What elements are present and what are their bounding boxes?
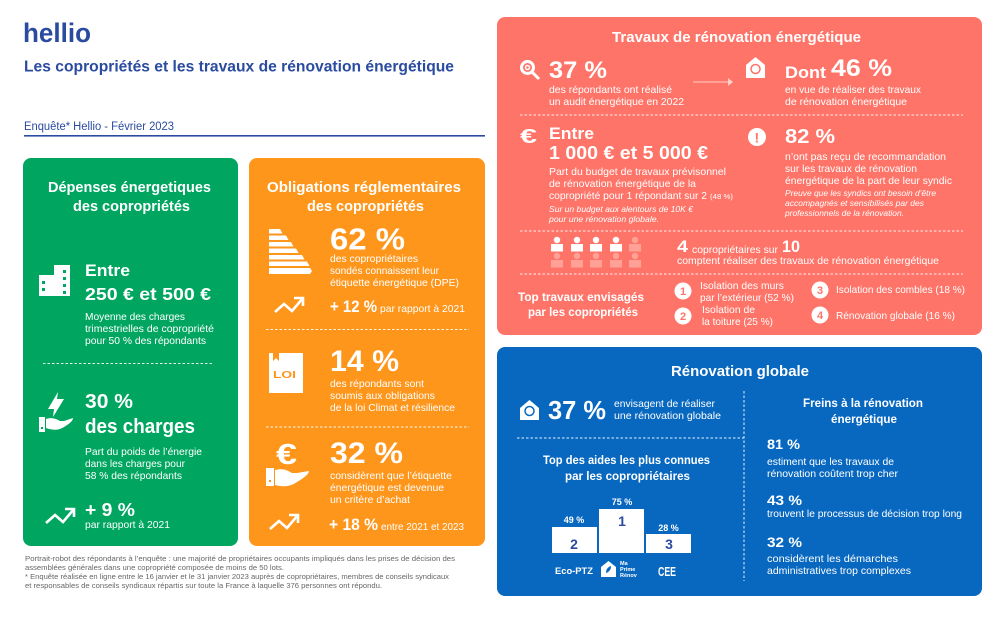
list: top travaux: Isolation des combles (18 %) bbox=[836, 284, 965, 296]
icon: euro in hand: € bbox=[276, 439, 297, 471]
stat: plus 18 %: + 18 % bbox=[329, 515, 378, 534]
stat: 30 % des charges bbox=[85, 391, 202, 482]
stat: 30 % des charges: 58 % des répondants bbox=[85, 470, 182, 482]
stat: entre 250 et 500 euros: Entre bbox=[85, 261, 130, 280]
stat: 81 %: rénovation coûtent trop cher bbox=[767, 468, 899, 480]
stat: 82 %: énergétique de la part de leur syndic bbox=[785, 175, 952, 187]
stat: 82 %: 82 % bbox=[785, 126, 835, 148]
stat: 43 %: trouvent le processus de décision trop long bbox=[767, 508, 962, 520]
stat: 62 %: sondés connaissent leur bbox=[330, 265, 439, 277]
list: top travaux: Isolation des murs bbox=[700, 280, 784, 292]
stat: 37 % audit: un audit énergétique en 2022 bbox=[549, 96, 684, 108]
stat: 4 copropriétaires sur 10: 10 bbox=[782, 237, 800, 256]
stat: entre 250 et 500 euros: Moyenne des charges bbox=[85, 311, 185, 323]
list: top travaux: Isolation de bbox=[702, 304, 755, 316]
stat: 82 %: sur les travaux de rénovation bbox=[785, 163, 917, 175]
logo: MaPrimeRénov bbox=[601, 561, 638, 579]
panel: dépenses énergétiques bbox=[23, 158, 238, 546]
stat: 4 copropriétaires sur 10: comptent réaliser des travaux de rénovation énergétique bbox=[677, 255, 939, 267]
chart: podium: 2 bbox=[570, 536, 578, 552]
stat: 37 % audit bbox=[549, 57, 684, 108]
stat: 4 copropriétaires sur 10: 4 bbox=[677, 237, 689, 256]
stat: 37 % audit: des répondants ont réalisé bbox=[549, 84, 672, 96]
footnotes: Portrait-robot des répondants à l’enquête : une majorité de propriétaires occupants impliqués dans les prises de décision des bbox=[25, 554, 455, 563]
icon: energy label bars bbox=[269, 229, 312, 274]
heading: freins: Freins à la rénovation bbox=[803, 398, 923, 410]
list: top travaux: la toiture (25 %) bbox=[702, 316, 773, 328]
stat: entre 1000 et 5000 euros: copropriété pour 1 répondant sur 2 bbox=[549, 190, 707, 202]
stat: 62 % bbox=[330, 222, 459, 289]
stat: 43 % bbox=[767, 492, 962, 520]
stat: 82 %: accompagnés et sensibilisés par des bbox=[785, 199, 924, 208]
label: Eco-PTZ: Eco-PTZ bbox=[555, 566, 594, 576]
stat: 82 %: n’ont pas reçu de recommandation bbox=[785, 151, 946, 163]
chart: podium: 75 % bbox=[612, 497, 632, 507]
stat: 62 %: des copropriétaires bbox=[330, 253, 418, 265]
panel: obligations réglementaires bbox=[249, 158, 485, 546]
stat: 32 %: 32 % bbox=[330, 437, 403, 470]
stat: entre 250 et 500 euros: trimestrielles de copropriété bbox=[85, 323, 214, 335]
stat: 32 %: énergétique est devenue bbox=[330, 482, 444, 494]
stat: entre 1000 et 5000 euros: de rénovation énergétique de la bbox=[549, 178, 696, 190]
chart: podium bbox=[552, 497, 691, 553]
list: top travaux: 1 bbox=[680, 286, 686, 298]
heading: top travaux: Top travaux envisagés bbox=[518, 290, 644, 304]
stat: entre 250 et 500 euros: pour 50 % des répondants bbox=[85, 335, 206, 347]
stat: 43 %: 43 % bbox=[767, 492, 803, 508]
stat: 30 % des charges: dans les charges pour bbox=[85, 458, 185, 470]
stat: 37 % rénovation globale: une rénovation globale bbox=[614, 410, 721, 422]
stat: plus 9 %: par rapport à 2021 bbox=[85, 519, 170, 531]
survey subtitle: Enquête* Hellio - Février 2023 bbox=[24, 121, 174, 133]
stat: 37 % rénovation globale: 37 % bbox=[548, 395, 606, 425]
icon: people pictogram, 4 of 10 bbox=[551, 237, 641, 268]
chart: podium: 3 bbox=[665, 536, 673, 552]
panel: rénovation globale bbox=[497, 347, 982, 596]
logo: MaPrimeRénov: Rénov bbox=[620, 573, 638, 579]
heading: freins: énergétique bbox=[831, 414, 897, 426]
stat: 32 %: un critère d’achat bbox=[330, 494, 410, 506]
icon: law book bbox=[269, 353, 303, 393]
stat: dont 46 %: Dont bbox=[785, 63, 826, 82]
stat: plus 12 %: + 12 % bbox=[330, 297, 377, 316]
icon: exclamation bbox=[748, 128, 766, 146]
heading: obligations bbox=[267, 180, 461, 215]
label: CEE: CEE bbox=[658, 564, 676, 579]
footnotes: * Enquête réalisée en ligne entre le 16 janvier et le 31 janvier 2023 auprès de copropriétaires, membres de conseils syndicaux bbox=[25, 572, 449, 581]
stat: entre 1000 et 5000 euros: Part du budget de travaux prévisonnel bbox=[549, 166, 726, 178]
stat: 37 % rénovation globale: envisagent de réaliser bbox=[614, 398, 715, 410]
stat: 82 % bbox=[784, 126, 952, 218]
stat: 30 % des charges: Part du poids de l’énergie bbox=[85, 446, 202, 458]
heading: top travaux: par les copropriétés bbox=[528, 305, 638, 319]
heading: travaux: Travaux de rénovation énergétique bbox=[612, 30, 861, 46]
stat: 37 % audit: 37 % bbox=[549, 57, 607, 84]
icon: house renovation bbox=[746, 57, 765, 78]
icon: euro in hand bbox=[266, 439, 309, 486]
stat: dont 46 %: de rénovation énergétique bbox=[785, 96, 907, 108]
heading: top des aides bbox=[543, 455, 710, 483]
stat: plus 18 % bbox=[329, 515, 464, 534]
stat: 30 % des charges: des charges bbox=[85, 416, 195, 438]
stat: 32 %: considèrent les démarches bbox=[767, 553, 898, 565]
stat: 32 %: considèrent que l’étiquette bbox=[330, 470, 452, 482]
stat: 32 %: administratives trop complexes bbox=[767, 565, 911, 577]
heading: obligations: Obligations réglementaires bbox=[267, 180, 461, 196]
list: top travaux: 2 bbox=[680, 311, 686, 323]
heading: dépenses: des copropriétés bbox=[73, 199, 190, 215]
stat: plus 12 % bbox=[330, 297, 465, 316]
stat: plus 12 %: par rapport à 2021 bbox=[380, 303, 465, 315]
stat: 81 % bbox=[767, 436, 899, 480]
stat: 62 %: 62 % bbox=[330, 222, 405, 256]
heading: dépenses: Dépenses énergetiques bbox=[48, 180, 211, 196]
stat: 14 %: de la loi Climat et résilience bbox=[330, 402, 455, 414]
stat: 81 %: 81 % bbox=[767, 436, 801, 452]
icon: law book: LOI bbox=[273, 369, 296, 381]
stat: 82 %: Preuve que les syndics ont besoin d’être bbox=[785, 189, 937, 198]
stat: 14 %: des répondants sont bbox=[330, 378, 424, 390]
icon: magnifier bbox=[522, 62, 539, 79]
heading: freins bbox=[803, 398, 923, 426]
stat: plus 18 %: entre 2021 et 2023 bbox=[381, 521, 464, 533]
list: top travaux: 4 bbox=[817, 310, 824, 322]
stat: dont 46 % bbox=[785, 55, 922, 108]
heading: top des aides: Top des aides les plus connues bbox=[543, 455, 710, 467]
stat: 82 %: professionnels de la rénovation. bbox=[784, 209, 904, 218]
chart: podium: 28 % bbox=[658, 523, 679, 533]
logo: MaPrimeRénov: Ma bbox=[620, 561, 629, 567]
icon: energy in hand bbox=[39, 392, 73, 432]
list: top travaux bbox=[674, 280, 965, 328]
stat: 4 copropriétaires sur 10 bbox=[677, 237, 939, 267]
stat: plus 9 %: + 9 % bbox=[85, 500, 135, 520]
logo: hellio: hellio bbox=[23, 18, 91, 48]
logo: MaPrimeRénov: Prime bbox=[620, 567, 635, 573]
stat: 14 %: soumis aux obligations bbox=[330, 390, 435, 402]
icon: house renovation bbox=[520, 400, 539, 420]
stat: 81 %: estiment que les travaux de bbox=[767, 456, 894, 468]
stat: entre 250 et 500 euros: 250 € et 500 € bbox=[85, 284, 211, 304]
heading: top travaux bbox=[518, 290, 644, 319]
icon: trend arrow bbox=[46, 509, 74, 523]
stat: entre 1000 et 5000 euros: Sur un budget aux alentours de 10K € bbox=[549, 205, 694, 214]
heading: top des aides: par les copropriétaires bbox=[565, 471, 690, 483]
stat: 14 %: 14 % bbox=[330, 345, 399, 378]
stat: entre 1000 et 5000 euros: 1 000 € et 5 000 € bbox=[549, 143, 708, 163]
stat: 32 % bbox=[767, 534, 911, 577]
stat: 30 % des charges: 30 % bbox=[85, 391, 133, 413]
stat: dont 46 %: en vue de réaliser des travaux bbox=[785, 84, 922, 96]
stat: entre 250 et 500 euros bbox=[85, 261, 214, 347]
title: Les copropriétés et les travaux de rénovation énergétique bbox=[24, 58, 454, 76]
arrow bbox=[693, 78, 733, 86]
stat: dont 46 %: 46 % bbox=[831, 55, 892, 82]
stat: 4 copropriétaires sur 10: copropriétaires sur bbox=[692, 244, 778, 256]
stat: 32 % bbox=[330, 437, 452, 506]
heading: dépenses bbox=[48, 180, 211, 215]
panel: travaux de rénovation énergétique bbox=[497, 17, 982, 335]
chart: podium: 49 % bbox=[564, 515, 584, 525]
stat: 14 % bbox=[330, 345, 455, 414]
footnotes: assemblées générales dans une copropriété composée de moins de 50 lots. bbox=[25, 563, 284, 572]
icon: exclamation: ! bbox=[754, 130, 759, 146]
footnotes bbox=[25, 554, 455, 590]
stat: 62 %: étiquette énergétique (DPE) bbox=[330, 277, 459, 289]
heading: rénovation globale: Rénovation globale bbox=[671, 364, 809, 380]
icon: euro: € bbox=[520, 126, 537, 148]
heading: obligations: des copropriétés bbox=[307, 199, 424, 215]
stat: plus 9 % bbox=[85, 500, 170, 531]
list: top travaux: par l’extérieur (52 %) bbox=[700, 292, 794, 304]
footnotes: et responsables de conseils syndicaux répartis sur toute la France à laquelle 376 personnes ont répondu. bbox=[25, 581, 382, 590]
icon: trend arrow bbox=[275, 298, 303, 312]
icon: trend arrow bbox=[270, 515, 298, 529]
icon: building bbox=[39, 265, 70, 296]
stat: 32 %: 32 % bbox=[767, 534, 803, 550]
list: top travaux: Rénovation globale (16 %) bbox=[836, 310, 955, 322]
list: top travaux: 3 bbox=[817, 285, 823, 297]
stat: 37 % rénovation globale bbox=[548, 395, 721, 425]
stat: entre 1000 et 5000 euros: pour une rénovation globale. bbox=[548, 215, 659, 224]
stat: entre 1000 et 5000 euros: (48 %) bbox=[710, 192, 734, 201]
stat: entre 1000 et 5000 euros: Entre bbox=[549, 124, 594, 143]
stat: entre 1000 et 5000 euros bbox=[548, 124, 734, 224]
chart: podium: 1 bbox=[618, 513, 626, 529]
